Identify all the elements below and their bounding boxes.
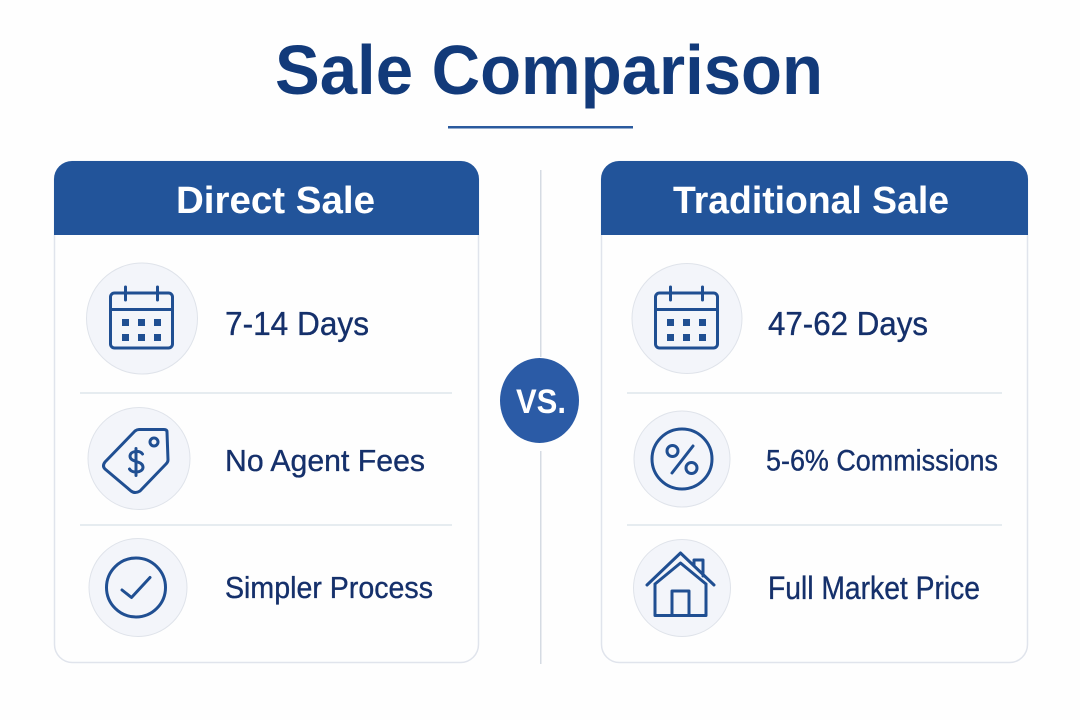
row divider — [627, 524, 1002, 526]
row divider — [80, 392, 452, 394]
text: full market price: Full Market Price — [768, 570, 980, 606]
center divider — [540, 170, 542, 664]
row divider — [80, 524, 452, 526]
panel header: direct sale — [54, 161, 479, 235]
icon: price tag — [88, 408, 190, 510]
icon: house — [634, 540, 730, 636]
text: 5-6% commissions: 5-6% Commissions — [766, 444, 998, 478]
panel: direct sale — [54, 161, 479, 662]
icon: calendar — [86, 263, 198, 374]
text: simpler process: Simpler Process — [225, 570, 433, 605]
text: no agent fees: No Agent Fees — [225, 443, 425, 478]
panel header: traditional sale — [601, 161, 1028, 235]
heading: traditional sale: Traditional Sale — [673, 180, 949, 222]
icon: check circle — [89, 538, 187, 636]
row divider — [627, 392, 1002, 394]
icon: percent — [634, 411, 730, 507]
title: Sale Comparison — [275, 31, 823, 109]
panel: traditional sale — [601, 161, 1028, 662]
text: 47-62 days: 47-62 Days — [768, 305, 928, 342]
icon: calendar — [632, 264, 742, 374]
text: 7-14 days: 7-14 Days — [225, 305, 369, 342]
title underline — [448, 126, 633, 128]
vs badge — [500, 358, 579, 443]
vs badge: VS. — [516, 383, 566, 421]
heading: direct sale: Direct Sale — [176, 180, 375, 222]
